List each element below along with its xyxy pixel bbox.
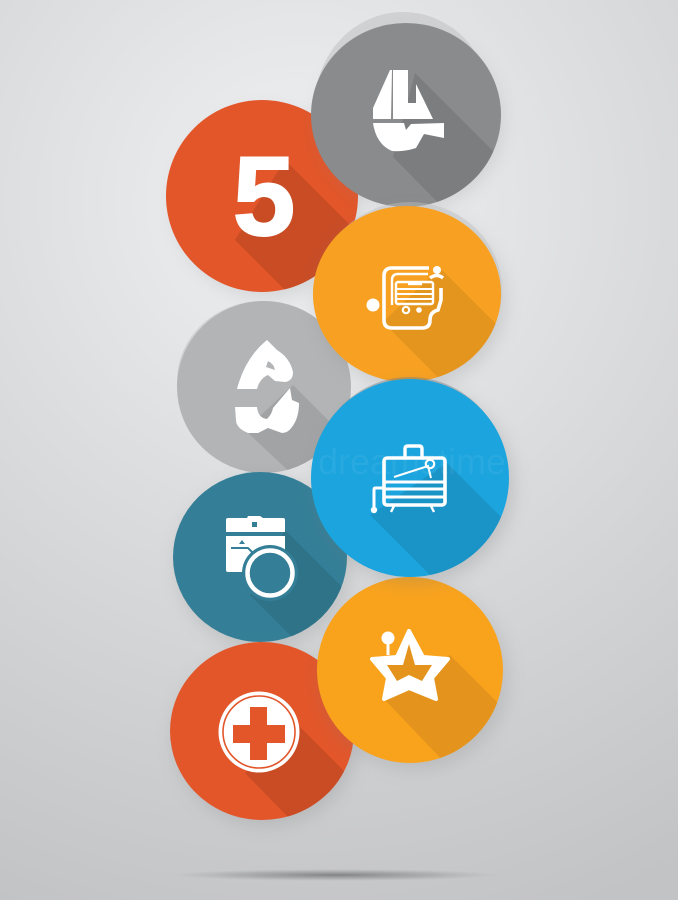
icon: medical cross [218,692,300,772]
circle: red number five [166,100,366,300]
floor shadow [170,869,500,881]
watermark: dreamstime [318,441,506,482]
circle: light gray number three [177,301,351,472]
circle: teal camera [173,472,354,646]
icon: stylised three [235,340,299,433]
circle: red medical cross [170,642,358,827]
circle: blue toolbox [311,377,518,590]
icon: star [372,631,448,699]
icon: camera [226,516,298,601]
icon: document device [366,266,443,328]
icon: toolbox [371,446,445,513]
icon: sailboat [373,70,444,151]
circle: dark gray sailboat [311,12,504,208]
circle: orange star [317,577,510,770]
circle: orange document [313,202,508,384]
number 5: 5 [233,134,295,259]
